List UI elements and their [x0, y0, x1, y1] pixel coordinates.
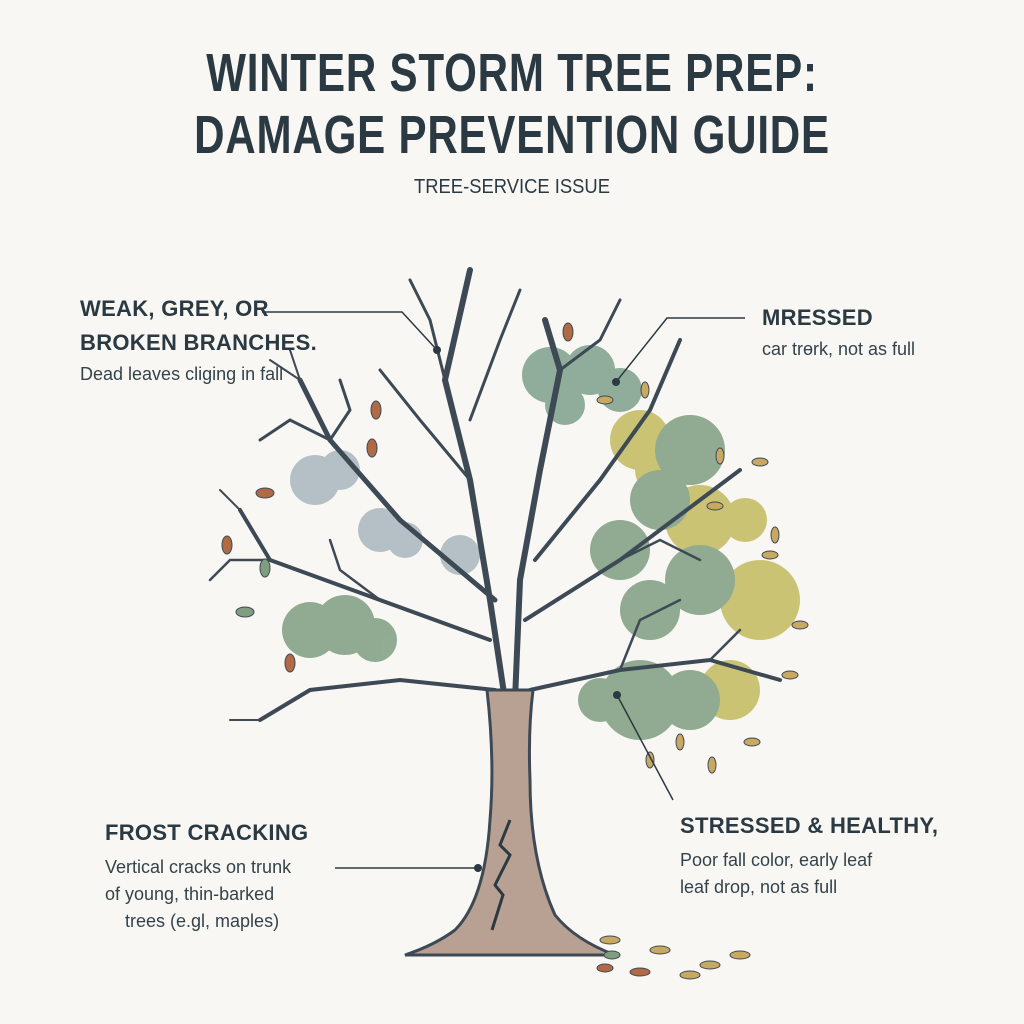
- callout: frost cracking: trees (e.gl, maples): [125, 911, 279, 931]
- callout: mressed: MRESSED: [762, 305, 873, 330]
- frost crack: [492, 820, 510, 930]
- callout: weak branches: BROKEN BRANCHES.: [80, 330, 317, 355]
- callout: frost cracking: of young, thin-barked: [105, 884, 274, 904]
- title: [194, 43, 830, 165]
- title: DAMAGE PREVENTION GUIDE: [194, 105, 830, 165]
- callout: mressed: car trөrk, not as full: [762, 339, 915, 359]
- callout: stressed & healthy: STRESSED & HEALTHY,: [680, 813, 938, 838]
- callout: frost cracking: FROST CRACKING: [105, 820, 308, 845]
- callout: weak branches: [80, 296, 317, 384]
- branches: [210, 270, 780, 720]
- callout: mressed: [762, 305, 915, 359]
- subtitle: TREE-SERVICE ISSUE: [414, 176, 610, 198]
- callout: frost cracking: Vertical cracks on trunk: [105, 857, 291, 877]
- foliage clusters: [282, 345, 800, 740]
- callout: frost cracking: [105, 820, 308, 931]
- trunk: [405, 690, 615, 955]
- callout: stressed & healthy: Poor fall color, early leaf: [680, 850, 872, 870]
- callout: weak branches: WEAK, GREY, OR: [80, 296, 269, 321]
- callout: stressed & healthy: [680, 813, 938, 897]
- leaves: [597, 382, 808, 979]
- callout lines: [262, 312, 745, 868]
- title: WINTER STORM TREE PREP:: [206, 43, 818, 103]
- callout: stressed & healthy: leaf drop, not as full: [680, 877, 837, 897]
- callout: weak branches: Dead leaves cliging in fall: [80, 364, 283, 384]
